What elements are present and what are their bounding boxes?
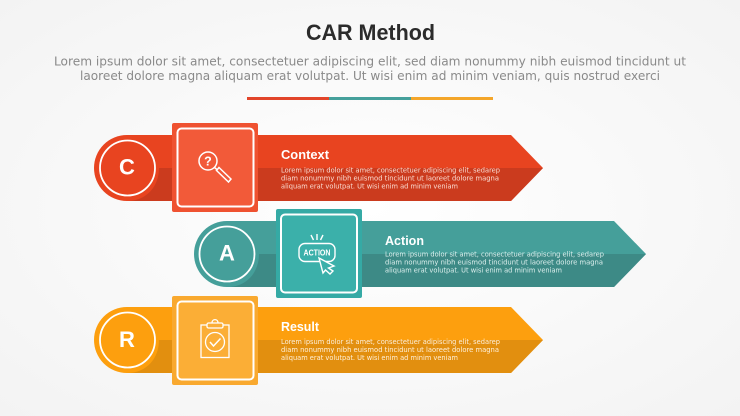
arrow bar: result bbox=[94, 307, 543, 373]
body text: context: aliquam erat volutpat. Ut wisi enim ad minim veniam bbox=[281, 182, 458, 190]
letter badge: A bbox=[200, 226, 254, 282]
body text: result: Lorem ipsum dolor sit amet, consectetuer adipiscing elit, sedarep bbox=[281, 338, 501, 346]
icon: action button with cursor bbox=[299, 234, 335, 274]
subtitle text: Lorem ipsum dolor sit amet, consectetuer adipiscing elit, sed diam nonummy nibh euismod tincidunt ut bbox=[54, 54, 686, 68]
icon tile: context bbox=[172, 123, 258, 212]
letter badge: R: R bbox=[119, 327, 135, 352]
icon tile: result bbox=[172, 296, 258, 385]
body text: result: diam nonummy nibh euismod tincidunt ut laoreet dolore magna bbox=[281, 346, 499, 354]
panel: result bbox=[94, 296, 543, 385]
body text: result bbox=[281, 338, 501, 362]
subtitle text bbox=[54, 54, 686, 83]
letter badge: A: A bbox=[219, 240, 235, 266]
panel: action bbox=[194, 209, 646, 298]
arrow lower shade: result bbox=[127, 340, 543, 373]
arrow lower shade: action bbox=[227, 254, 646, 287]
body text: action: Lorem ipsum dolor sit amet, consectetuer adipiscing elit, sedarep bbox=[385, 250, 605, 258]
tri-colour divider bbox=[247, 97, 493, 100]
arrow bar: action bbox=[194, 221, 646, 287]
icon: action button with cursor: ACTION bbox=[304, 248, 331, 258]
arrow lower shade: context bbox=[127, 168, 543, 201]
letter badge: C: C bbox=[119, 154, 135, 180]
heading: result: Result bbox=[281, 319, 320, 334]
letter badge: R bbox=[100, 312, 155, 368]
icon tile: action bbox=[276, 209, 362, 298]
subtitle text: laoreet dolore magna aliquam erat volutpat. Ut wisi enim ad minim veniam, quis nostrud exerci bbox=[80, 68, 660, 83]
icon: magnifier with question mark: ? bbox=[204, 154, 212, 168]
body text: context: diam nonummy nibh euismod tincidunt ut laoreet dolore magna bbox=[281, 174, 499, 182]
heading: context: Context bbox=[281, 147, 330, 162]
arrow bar: context bbox=[94, 135, 543, 201]
letter badge: C bbox=[100, 140, 155, 196]
panel: context bbox=[94, 123, 543, 212]
title: CAR Method bbox=[306, 20, 435, 45]
body text: context: Lorem ipsum dolor sit amet, consectetuer adipiscing elit, sedarep bbox=[281, 166, 501, 174]
heading: action: Action bbox=[385, 233, 424, 248]
body text: action: aliquam erat volutpat. Ut wisi enim ad minim veniam bbox=[385, 266, 562, 274]
icon: clipboard with check bbox=[201, 320, 229, 358]
icon: magnifier with question mark bbox=[199, 152, 231, 182]
body text: action: diam nonummy nibh euismod tincidunt ut laoreet dolore magna bbox=[385, 258, 603, 266]
body text: context bbox=[281, 166, 501, 190]
body text: result: aliquam erat volutpat. Ut wisi enim ad minim veniam bbox=[281, 354, 458, 362]
body text: action bbox=[385, 250, 605, 274]
